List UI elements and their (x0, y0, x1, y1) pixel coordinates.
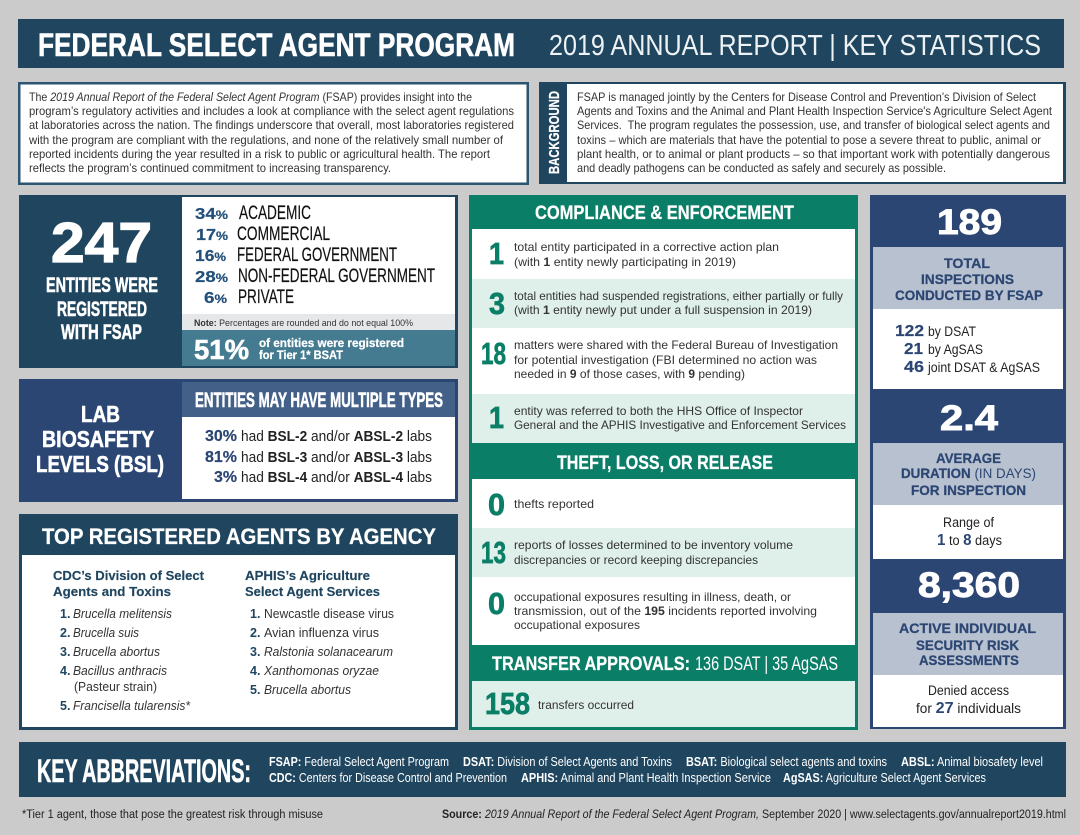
stat: FBI matters (481, 336, 838, 381)
stat: 2.4 average duration: FOR INSPECTION (911, 482, 1026, 498)
stat: occupational exposures: occupational exposures resulting in illness, death, or (514, 590, 791, 604)
stat: corrective action: (with 1 entity newly participating in 2019) (514, 255, 736, 269)
tier 1 callout: of entities were registered (259, 336, 404, 350)
APHIS agent list (245, 568, 394, 697)
entity type percentages: 34% (195, 206, 228, 223)
stat: thefts (488, 487, 594, 522)
biosafety rows: had BSL-3 and/or ABSL-3 labs (241, 449, 432, 466)
CDC agent list: Francisella tularensis* (73, 699, 191, 713)
biosafety heading (36, 401, 164, 477)
stat: 189 inspections: CONDUCTED BY FSAP (895, 287, 1043, 303)
compliance heading: COMPLIANCE & ENFORCEMENT (535, 203, 794, 224)
theft heading: THEFT, LOSS, OR RELEASE (557, 453, 773, 474)
stat: occupational exposures: 0 (488, 586, 505, 621)
note: Note: Percentages are rounded and do not equal 100% (194, 318, 414, 329)
transfer heading: 136 DSAT | 35 AgSAS (695, 654, 838, 675)
stat: transfers (485, 686, 634, 721)
biosafety rows: 81% (205, 449, 237, 466)
CDC agent list: Brucella melitensis (73, 607, 172, 621)
panel: inspection statistics (870, 195, 1066, 729)
abbreviation list: APHIS: Animal and Plant Health Inspection Service (521, 771, 771, 785)
source line: Source: 2019 Annual Report of the Federal Select Agent Program, September 2020 | www.selectagents.gov/annualreport2019.html (442, 809, 1066, 821)
APHIS agent list: Ralstonia solanacearum (264, 645, 393, 659)
stat: corrective action: total entity participated in a corrective action plan (514, 240, 779, 254)
CDC agent list: (Pasteur strain) (74, 680, 157, 694)
CDC agent list: Bacillus anthracis (73, 664, 167, 678)
footnote: *Tier 1 agent, those that pose the greatest risk through misuse (22, 809, 323, 821)
APHIS agent list: 2. (250, 626, 260, 640)
entity type percentages: FEDERAL GOVERNMENT (237, 245, 397, 266)
APHIS agent list: Xanthomonas oryzae (263, 664, 379, 678)
panel: background: plant health, or to animal or plant products – so that important work with potentially dangerous (577, 147, 1050, 161)
biosafety rows: had BSL-2 and/or ABSL-2 labs (241, 428, 432, 445)
panel: background: FSAP is managed jointly by the Centers for Disease Control and Prevention’s Division of Select (577, 90, 1037, 104)
stat: referrals: 1 (489, 400, 504, 435)
stat: FBI matters: 18 (481, 336, 506, 371)
stat: thefts: thefts reported (514, 497, 594, 511)
stat: suspended registrations: (with 1 entity newly put under a full suspension in 2019) (514, 303, 812, 317)
stat: 2.4 average duration: Range of (943, 515, 994, 530)
transfer heading: TRANSFER APPROVALS: (492, 654, 690, 675)
abbreviation list (269, 755, 1043, 785)
stat: corrective action (489, 236, 779, 271)
stat: 189 inspections: joint DSAT & AgSAS (927, 360, 1040, 375)
CDC agent list: Brucella suis (73, 626, 139, 640)
stat: 2.4 average duration (901, 399, 1036, 549)
entities label: WITH FSAP (61, 321, 142, 344)
panel: background (539, 82, 1066, 184)
CDC agent list: CDC’s Division of Select (53, 568, 205, 583)
transfer heading (492, 654, 838, 675)
APHIS agent list: Newcastle disease virus (264, 607, 394, 621)
multiple types heading: ENTITIES MAY HAVE MULTIPLE TYPES (195, 389, 443, 412)
panel: introduction: at laboratories across the nation. The findings underscore that overall, most laboratories registered (29, 118, 514, 132)
stat: 8,360 security risk assessments: ASSESSMENTS (919, 652, 1019, 668)
stat: 2.4 average duration: DURATION (IN DAYS) (901, 465, 1036, 481)
biosafety rows: 3% (214, 469, 237, 486)
stat: losses: reports of losses determined to be inventory volume (514, 538, 793, 552)
entities label (46, 274, 158, 344)
stat: 189 inspections: 189 (937, 203, 1002, 242)
entity type percentages: ACADEMIC (239, 203, 311, 224)
biosafety rows: had BSL-4 and/or ABSL-4 labs (241, 469, 432, 486)
entity type percentages: 28% (195, 269, 228, 286)
stat: suspended registrations: 3 (489, 286, 505, 321)
biosafety heading: BIOSAFETY (42, 426, 154, 452)
stat: 2.4 average duration: AVERAGE (936, 450, 1001, 466)
CDC agent list (53, 568, 205, 713)
stat: transfers: 158 (485, 686, 530, 721)
entity type percentages: COMMERCIAL (237, 224, 330, 245)
stat: 8,360 security risk assessments: SECURITY RISK (916, 637, 1019, 653)
APHIS agent list: 1. (250, 607, 260, 621)
title: FEDERAL SELECT AGENT PROGRAM (38, 27, 515, 63)
agents heading: TOP REGISTERED AGENTS BY AGENCY (42, 524, 436, 549)
stat: 189 inspections (895, 203, 1043, 376)
entity type percentages: 16% (195, 248, 226, 265)
abbreviation list: FSAP: Federal Select Agent Program (269, 755, 449, 769)
biosafety rows: 30% (205, 428, 237, 445)
stat: losses: 13 (481, 535, 506, 570)
entity type percentages: NON-FEDERAL GOVERNMENT (238, 266, 435, 287)
stat: thefts: 0 (488, 487, 505, 522)
stat: 8,360 security risk assessments: Denied access (928, 683, 1009, 698)
panel: compliance, theft and transfers (469, 195, 858, 730)
panel: introduction: reflects the program’s continued commitment to increasing transparency. (29, 161, 391, 175)
stat: 189 inspections: by AgSAS (928, 342, 983, 357)
abbreviation list: AgSAS: Agriculture Select Agent Services (783, 771, 986, 785)
stat: referrals (489, 400, 846, 435)
entity type percentages: PRIVATE (238, 287, 294, 308)
APHIS agent list: Select Agent Services (245, 584, 380, 599)
stat: occupational exposures: transmission, out of the 195 incidents reported involving (514, 604, 817, 618)
entity type percentages: 17% (196, 227, 228, 244)
key abbreviations bar (19, 742, 1066, 797)
stat: occupational exposures (488, 586, 817, 632)
panel: background: Agents and Toxins and the Animal and Plant Health Inspection Service's Agriculture Select Agent (577, 104, 1053, 118)
stat: 8,360 security risk assessments: 8,360 (918, 566, 1020, 605)
APHIS agent list: 3. (250, 645, 260, 659)
panel: background: and deadly pathogens can be conducted as safely and securely as possible. (577, 161, 946, 175)
biosafety heading: LAB (81, 401, 120, 427)
panel: introduction: program’s regulatory activities and includes a look at compliance with the select agent regulations (29, 104, 514, 118)
stat: 189 inspections: by DSAT (928, 324, 976, 339)
stat: 2.4 average duration: 2.4 (940, 399, 999, 438)
stat: 189 inspections: TOTAL (944, 255, 990, 271)
stat: occupational exposures: occupational exposures (514, 618, 640, 632)
stat: 189 inspections: 122 (895, 323, 924, 340)
panel: top registered agents (19, 514, 458, 730)
panel: lab biosafety levels (19, 379, 458, 502)
background side label: BACKGROUND (547, 91, 563, 174)
stat: losses (481, 535, 793, 570)
abbreviation list: CDC: Centers for Disease Control and Prevention (269, 771, 507, 785)
entities label: REGISTERED (57, 298, 147, 321)
CDC agent list: 3. (60, 645, 70, 659)
stat: FBI matters: needed in 9 of those cases, with 9 pending) (514, 367, 745, 381)
stat: 2.4 average duration: 1 to 8 days (937, 532, 1002, 549)
CDC agent list: Brucella abortus (73, 645, 160, 659)
stat: 8,360 security risk assessments (899, 566, 1036, 717)
entity type percentages: 6% (204, 290, 227, 307)
panel: introduction (19, 83, 528, 184)
APHIS agent list: Brucella abortus (264, 683, 351, 697)
tier 1 callout: 51% (194, 334, 249, 365)
stat: 8,360 security risk assessments: ACTIVE INDIVIDUAL (899, 620, 1036, 636)
biosafety rows (205, 428, 432, 486)
panel: introduction: with the program are compliant with the regulations, and none of the relatively small number of (28, 133, 504, 147)
CDC agent list: Agents and Toxins (53, 584, 171, 599)
CDC agent list: 4. (60, 664, 70, 678)
CDC agent list: 1. (60, 607, 70, 621)
stat: 189 inspections: 46 (904, 359, 924, 376)
tier 1 callout (194, 334, 404, 365)
big number 247: 247 (51, 211, 152, 275)
stat: referrals: General and the APHIS Investigative and Enforcement Services (514, 418, 846, 432)
biosafety heading: LEVELS (BSL) (36, 451, 164, 477)
APHIS agent list: 4. (250, 664, 260, 678)
entity type percentages (195, 203, 435, 308)
APHIS agent list: Avian influenza virus (264, 626, 379, 640)
stat: 8,360 security risk assessments: for 27 individuals (916, 700, 1021, 717)
panel: background: toxins – which are materials that have the potential to pose a severe threat to public, animal or (577, 133, 1041, 147)
panel: registered entities (19, 195, 458, 368)
CDC agent list: 5. (60, 699, 70, 713)
abbreviation list: BSAT: Biological select agents and toxins (686, 755, 887, 769)
panel: introduction: reported incidents during the year resulted in a risk to public or agricultural health. The report (29, 147, 491, 161)
stat: referrals: entity was referred to both the HHS Office of Inspector (514, 404, 803, 418)
CDC agent list: 2. (60, 626, 70, 640)
stat: FBI matters: matters were shared with the Federal Bureau of Investigation (514, 338, 838, 352)
stat: corrective action: 1 (489, 236, 504, 271)
APHIS agent list: APHIS’s Agriculture (245, 568, 370, 583)
entities label: ENTITIES WERE (46, 274, 158, 297)
stat: suspended registrations (489, 286, 843, 321)
stat: transfers: transfers occurred (538, 698, 634, 712)
title banner (18, 19, 1064, 68)
abbreviation list: DSAT: Division of Select Agents and Toxins (463, 755, 672, 769)
stat: suspended registrations: total entities had suspended registrations, either partially or fully (514, 289, 843, 303)
stat: 189 inspections: INSPECTIONS (921, 271, 1014, 287)
stat: FBI matters: for potential investigation (FBI determined no action was (514, 353, 817, 367)
tier 1 callout: for Tier 1* BSAT (259, 348, 344, 362)
abbreviation list: ABSL: Animal biosafety level (901, 755, 1043, 769)
panel: introduction: The 2019 Annual Report of the Federal Select Agent Program (FSAP) provides insight into the (29, 90, 472, 104)
APHIS agent list: 5. (250, 683, 260, 697)
key abbreviations heading: KEY ABBREVIATIONS: (37, 753, 251, 789)
stat: 189 inspections: 21 (904, 341, 923, 358)
stat: losses: discrepancies or record keeping discrepancies (514, 553, 758, 567)
